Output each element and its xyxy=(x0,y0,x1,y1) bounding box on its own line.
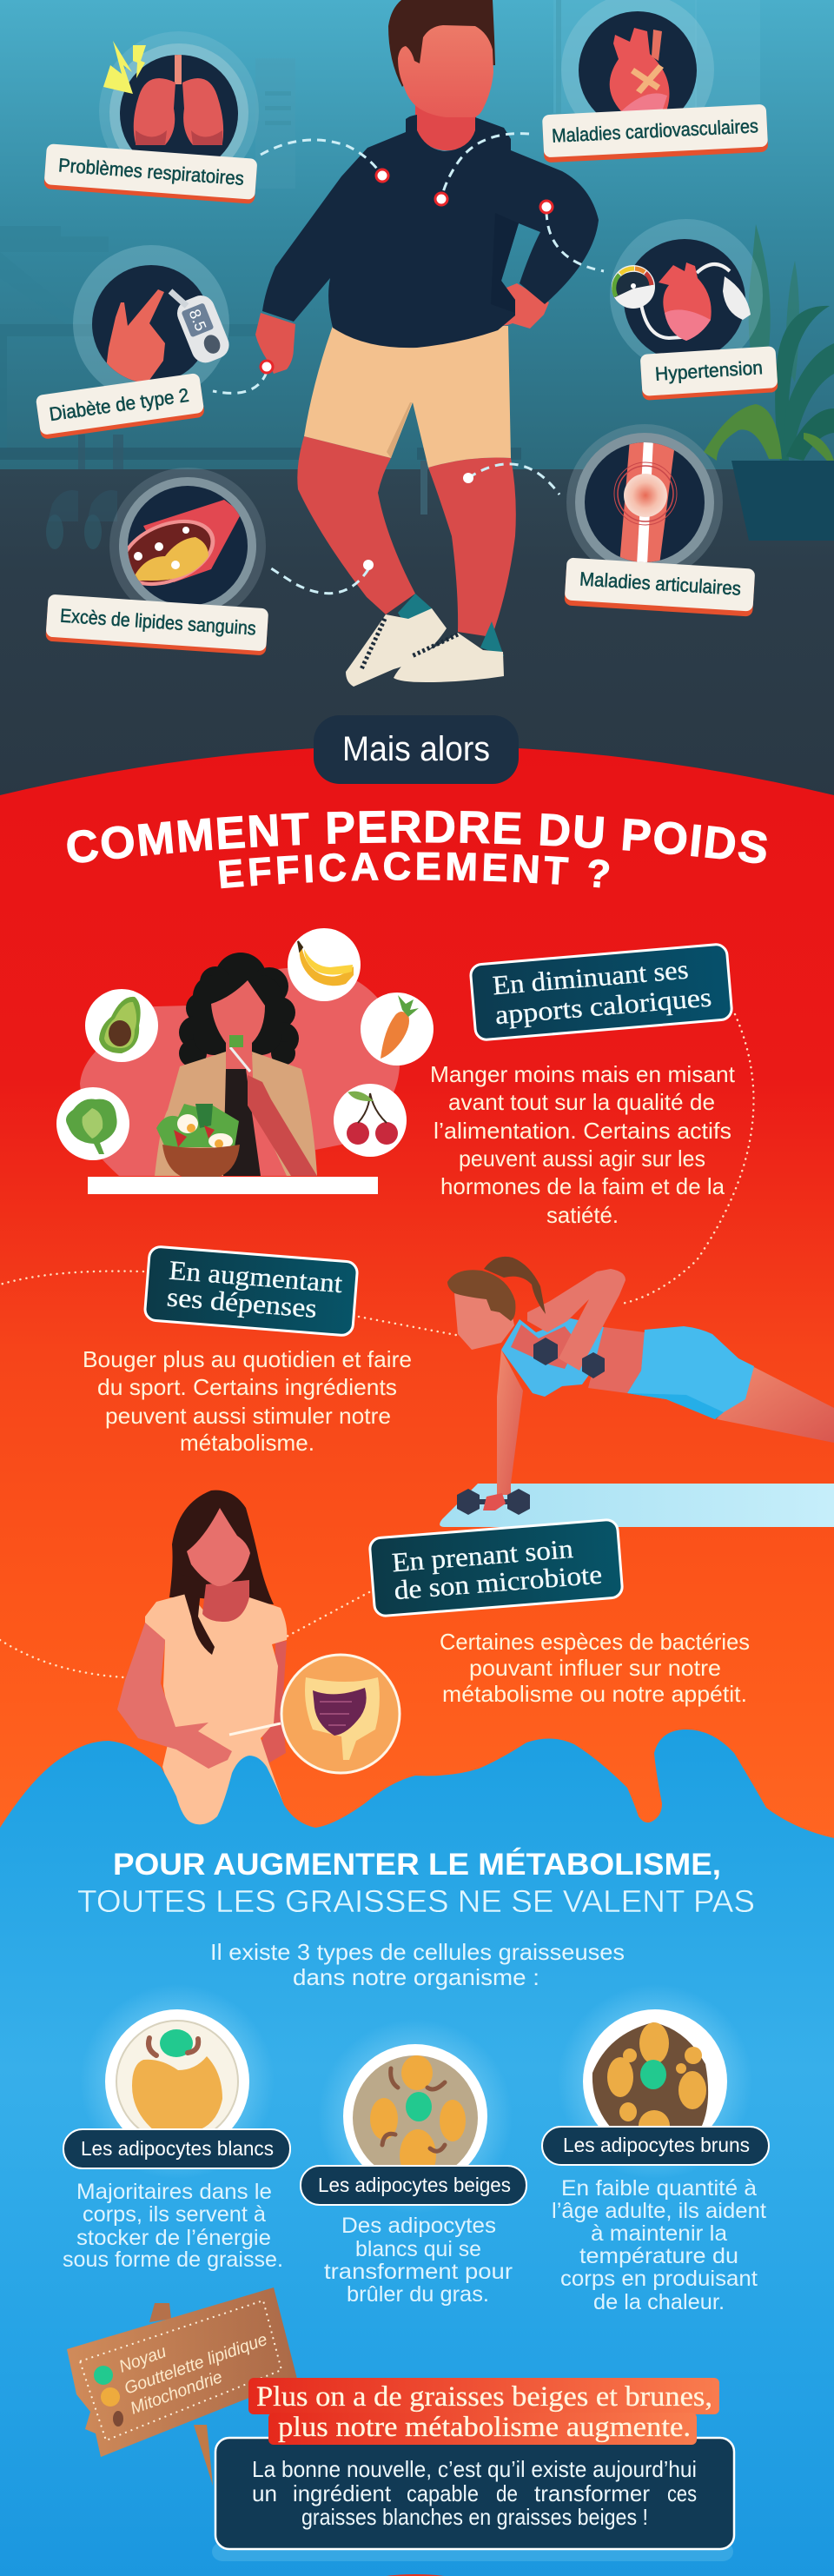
text: paragraph 2: peuvent aussi stimuler notre xyxy=(105,1403,391,1429)
pill: Mais alors xyxy=(314,715,519,784)
shorts xyxy=(627,1326,754,1419)
fork xyxy=(230,1047,250,1072)
label: En prenant soin de son microbiote xyxy=(369,1519,623,1617)
text: paragraph 3: pouvant influer sur notre xyxy=(469,1655,721,1681)
banner: plus on a de graisses: plus notre métabolisme augmente. xyxy=(278,2412,691,2443)
text: paragraph 1: avant tout sur la qualité de xyxy=(448,1089,715,1115)
label: Excès de lipides sanguins: Excès de lipides sanguins xyxy=(59,605,257,640)
cardigan xyxy=(155,1052,317,1176)
text: brown adipocyte description: l’âge adulte, ils aident xyxy=(552,2199,766,2223)
bowl xyxy=(162,1145,240,1180)
text: intro: Il existe 3 types de cellules graisseuses xyxy=(210,1939,625,1965)
pill: adipocytes blancs: Les adipocytes blancs xyxy=(81,2137,274,2160)
illustration: dashed connectors and dots xyxy=(213,134,604,594)
neck xyxy=(202,1580,249,1622)
box: bonne nouvelle: La bonne nouvelle, c’est qu’il existe aujourd’hui xyxy=(252,2456,697,2482)
magnifier xyxy=(281,1655,400,1773)
socks xyxy=(398,594,432,630)
label: Hypertension: Hypertension xyxy=(654,356,764,385)
box: bonne nouvelle: ingrédient xyxy=(293,2480,392,2506)
icon: white adipocyte xyxy=(80,1984,275,2179)
arm xyxy=(248,1075,317,1176)
title: Comment perdre du poids efficacement: COMMENT PERDRE DU POIDS xyxy=(67,810,767,864)
legend: wooden sign: Mitochondrie xyxy=(128,2367,225,2419)
label: Problèmes respiratoires xyxy=(43,143,257,204)
dots xyxy=(261,169,553,570)
text: beige adipocyte description: brûler du gras. xyxy=(347,2282,489,2307)
label: Maladies cardiovasculaires xyxy=(542,104,768,163)
pill: Mais alors: Mais alors xyxy=(342,730,490,768)
box: bonne nouvelle: de xyxy=(496,2480,518,2506)
heading: Pour augmenter le métabolisme: TOUTES LES GRAISSES NE SE VALENT PAS xyxy=(77,1883,755,1919)
text: white adipocyte description: stocker de l’énergie xyxy=(76,2226,271,2250)
text: paragraph 1: l’alimentation. Certains actifs xyxy=(434,1118,731,1144)
right arm xyxy=(252,1641,287,1764)
illustration: woman doing plank xyxy=(440,1257,834,1527)
label: Maladies articulaires xyxy=(564,557,755,617)
label: En prenant soin de son microbiote: En prenant soin xyxy=(391,1533,574,1577)
text: beige adipocyte description xyxy=(324,2214,513,2307)
heading: Pour augmenter le métabolisme: POUR AUGMENTER LE MÉTABOLISME, xyxy=(113,1847,721,1882)
bent arm xyxy=(527,1269,626,1371)
neck xyxy=(415,104,476,150)
pill: adipocytes bruns xyxy=(542,2127,769,2165)
panel: blue section with drips xyxy=(0,1730,834,2576)
right shoe xyxy=(394,633,504,682)
neck and face xyxy=(211,980,265,1073)
box: bonne nouvelle: capable xyxy=(407,2480,479,2506)
label: En augmentant ses dépenses: ses dépenses xyxy=(166,1281,318,1324)
text: brown adipocyte description: température du xyxy=(579,2244,738,2268)
right hand xyxy=(492,283,549,329)
pill: adipocytes bruns: Les adipocytes bruns xyxy=(563,2134,750,2156)
label: En augmentant ses dépenses: En augmentant xyxy=(168,1255,344,1298)
hair lock xyxy=(178,1573,215,1655)
illustration: dotted connectors xyxy=(0,1014,753,1677)
text: brown adipocyte description: corps en produisant xyxy=(560,2267,758,2291)
label: Problèmes respiratoires: Problèmes respiratoires xyxy=(57,154,245,189)
legend: wooden sign xyxy=(67,2287,297,2486)
text: paragraph 1: peuvent aussi agir sur les xyxy=(459,1145,705,1172)
icon: plant xyxy=(704,224,834,541)
left leg xyxy=(297,436,415,614)
text: white adipocyte description: Majoritaires dans le xyxy=(76,2180,272,2204)
text: white adipocyte description: sous forme de graisse. xyxy=(63,2247,283,2272)
text: paragraph 2: Bouger plus au quotidien et faire xyxy=(83,1346,412,1372)
label: Excès de lipides sanguins xyxy=(45,594,268,655)
pill: adipocytes beiges xyxy=(301,2166,526,2205)
label: Diabète de type 2: Diabète de type 2 xyxy=(48,384,190,425)
support arm xyxy=(497,1350,523,1495)
text: paragraph 1 xyxy=(430,1061,736,1228)
pink blob xyxy=(80,967,400,1176)
panel: red section xyxy=(0,746,834,1851)
torso xyxy=(588,1327,645,1393)
text: intro xyxy=(210,1939,625,1990)
mat xyxy=(440,1484,834,1527)
label: Maladies cardiovasculaires: Maladies cardiovasculaires xyxy=(552,115,758,147)
label: En diminuant ses apports caloriques: apports caloriques xyxy=(493,981,712,1030)
hair xyxy=(388,0,495,87)
text: brown adipocyte description xyxy=(552,2176,766,2314)
icon: cherries xyxy=(334,1084,407,1157)
salad xyxy=(156,1104,239,1149)
right leg xyxy=(428,457,516,637)
icon: spinach xyxy=(56,1087,129,1160)
box: bonne nouvelle: ces xyxy=(667,2480,697,2506)
text: brown adipocyte description: à maintenir la xyxy=(591,2221,727,2246)
text: beige adipocyte description: Des adipocytes xyxy=(341,2214,496,2238)
text: white adipocyte description: corps, ils servent à xyxy=(83,2202,266,2227)
text: paragraph 1: hormones de la faim et de la xyxy=(440,1173,725,1199)
icon: glucose meter and finger xyxy=(73,245,229,386)
banner: plus on a de graisses xyxy=(248,2378,719,2445)
decoration: bottom red arc xyxy=(337,2574,493,2576)
face xyxy=(187,1508,250,1586)
panel: hospital scene background xyxy=(0,0,834,817)
sports top xyxy=(501,1318,604,1397)
box: bonne nouvelle: un xyxy=(252,2480,277,2506)
dumbbells xyxy=(533,1338,558,1365)
hair xyxy=(447,1270,515,1321)
icon: knee joint xyxy=(566,424,723,581)
chest skin xyxy=(511,1325,578,1369)
shorts xyxy=(304,326,511,468)
table xyxy=(88,1177,378,1194)
label: En diminuant ses apports caloriques: En diminuant ses xyxy=(492,954,690,1000)
panel: man figure xyxy=(255,0,599,687)
pill: adipocytes beiges: Les adipocytes beiges xyxy=(318,2174,511,2196)
banner: plus on a de graisses: Plus on a de graisses beiges et brunes, xyxy=(256,2381,712,2413)
box: bonne nouvelle xyxy=(212,2438,734,2561)
face xyxy=(454,1293,514,1350)
left hand xyxy=(255,313,295,374)
heading: Pour augmenter le métabolisme xyxy=(77,1847,755,1919)
left shoe xyxy=(346,608,447,687)
pill: adipocytes blancs xyxy=(63,2129,290,2168)
text: paragraph 2: du sport. Certains ingrédients xyxy=(97,1374,397,1400)
illustration: woman eating salad xyxy=(80,953,400,1194)
text: paragraph 2: métabolisme. xyxy=(180,1430,314,1456)
icon: lungs xyxy=(99,31,259,158)
text: paragraph 3 xyxy=(440,1629,750,1707)
label: En diminuant ses apports caloriques xyxy=(470,944,732,1040)
label: Hypertension xyxy=(640,346,778,401)
label: En prenant soin de son microbiote: de son microbiote xyxy=(393,1559,603,1605)
t-shirt and body xyxy=(145,1593,289,1829)
illustration: woman with microbiota xyxy=(117,1490,400,1829)
text: brown adipocyte description: En faible quantité à xyxy=(561,2176,757,2201)
title: Comment perdre du poids efficacement: EFFICACEMENT ? xyxy=(219,852,610,888)
label: En augmentant ses dépenses xyxy=(144,1246,358,1336)
text: beige adipocyte description: transforment pour xyxy=(324,2260,513,2284)
icon: carrot xyxy=(361,993,434,1066)
text: paragraph 1: satiété. xyxy=(546,1202,619,1228)
box: bonne nouvelle: transformer xyxy=(534,2480,650,2506)
hair xyxy=(179,953,299,1067)
text: beige adipocyte description: blancs qui se xyxy=(355,2237,481,2261)
icon: hypertension heart and gauge xyxy=(610,219,763,372)
text: intro: dans notre organisme : xyxy=(293,1964,539,1990)
text: brown adipocyte description: de la chaleur. xyxy=(593,2290,725,2314)
icon: blocked artery xyxy=(109,468,266,607)
top xyxy=(223,1069,261,1176)
braid xyxy=(484,1257,546,1314)
text: paragraph 1: Manger moins mais en misant xyxy=(430,1061,736,1087)
text: white adipocyte description xyxy=(63,2180,283,2272)
icon: beige adipocyte xyxy=(318,2019,513,2214)
icon: avocado xyxy=(85,989,158,1062)
label: Maladies articulaires: Maladies articulaires xyxy=(579,568,742,600)
hoodie xyxy=(262,115,599,348)
text: paragraph 2 xyxy=(83,1346,412,1456)
legend: wooden sign: Noyau xyxy=(116,2342,169,2377)
text: paragraph 3: Certaines espèces de bactéries xyxy=(440,1629,750,1655)
icon: banana xyxy=(288,928,361,1001)
text: paragraph 3: métabolisme ou notre appétit. xyxy=(442,1681,747,1707)
legend: wooden sign: Gouttelette lipidique xyxy=(122,2330,270,2399)
face xyxy=(398,25,493,117)
hair xyxy=(169,1490,274,1604)
icon: heart with bandage xyxy=(561,0,714,113)
label: Diabète de type 2 xyxy=(36,373,205,440)
icon: glucose meter and finger: 8.5 xyxy=(185,307,209,334)
icon: brown adipocyte xyxy=(558,1984,752,2179)
box: bonne nouvelle: graisses blanches en graisses beiges ! xyxy=(301,2504,648,2530)
left arm and hand xyxy=(117,1623,232,1769)
leg xyxy=(717,1367,834,1443)
